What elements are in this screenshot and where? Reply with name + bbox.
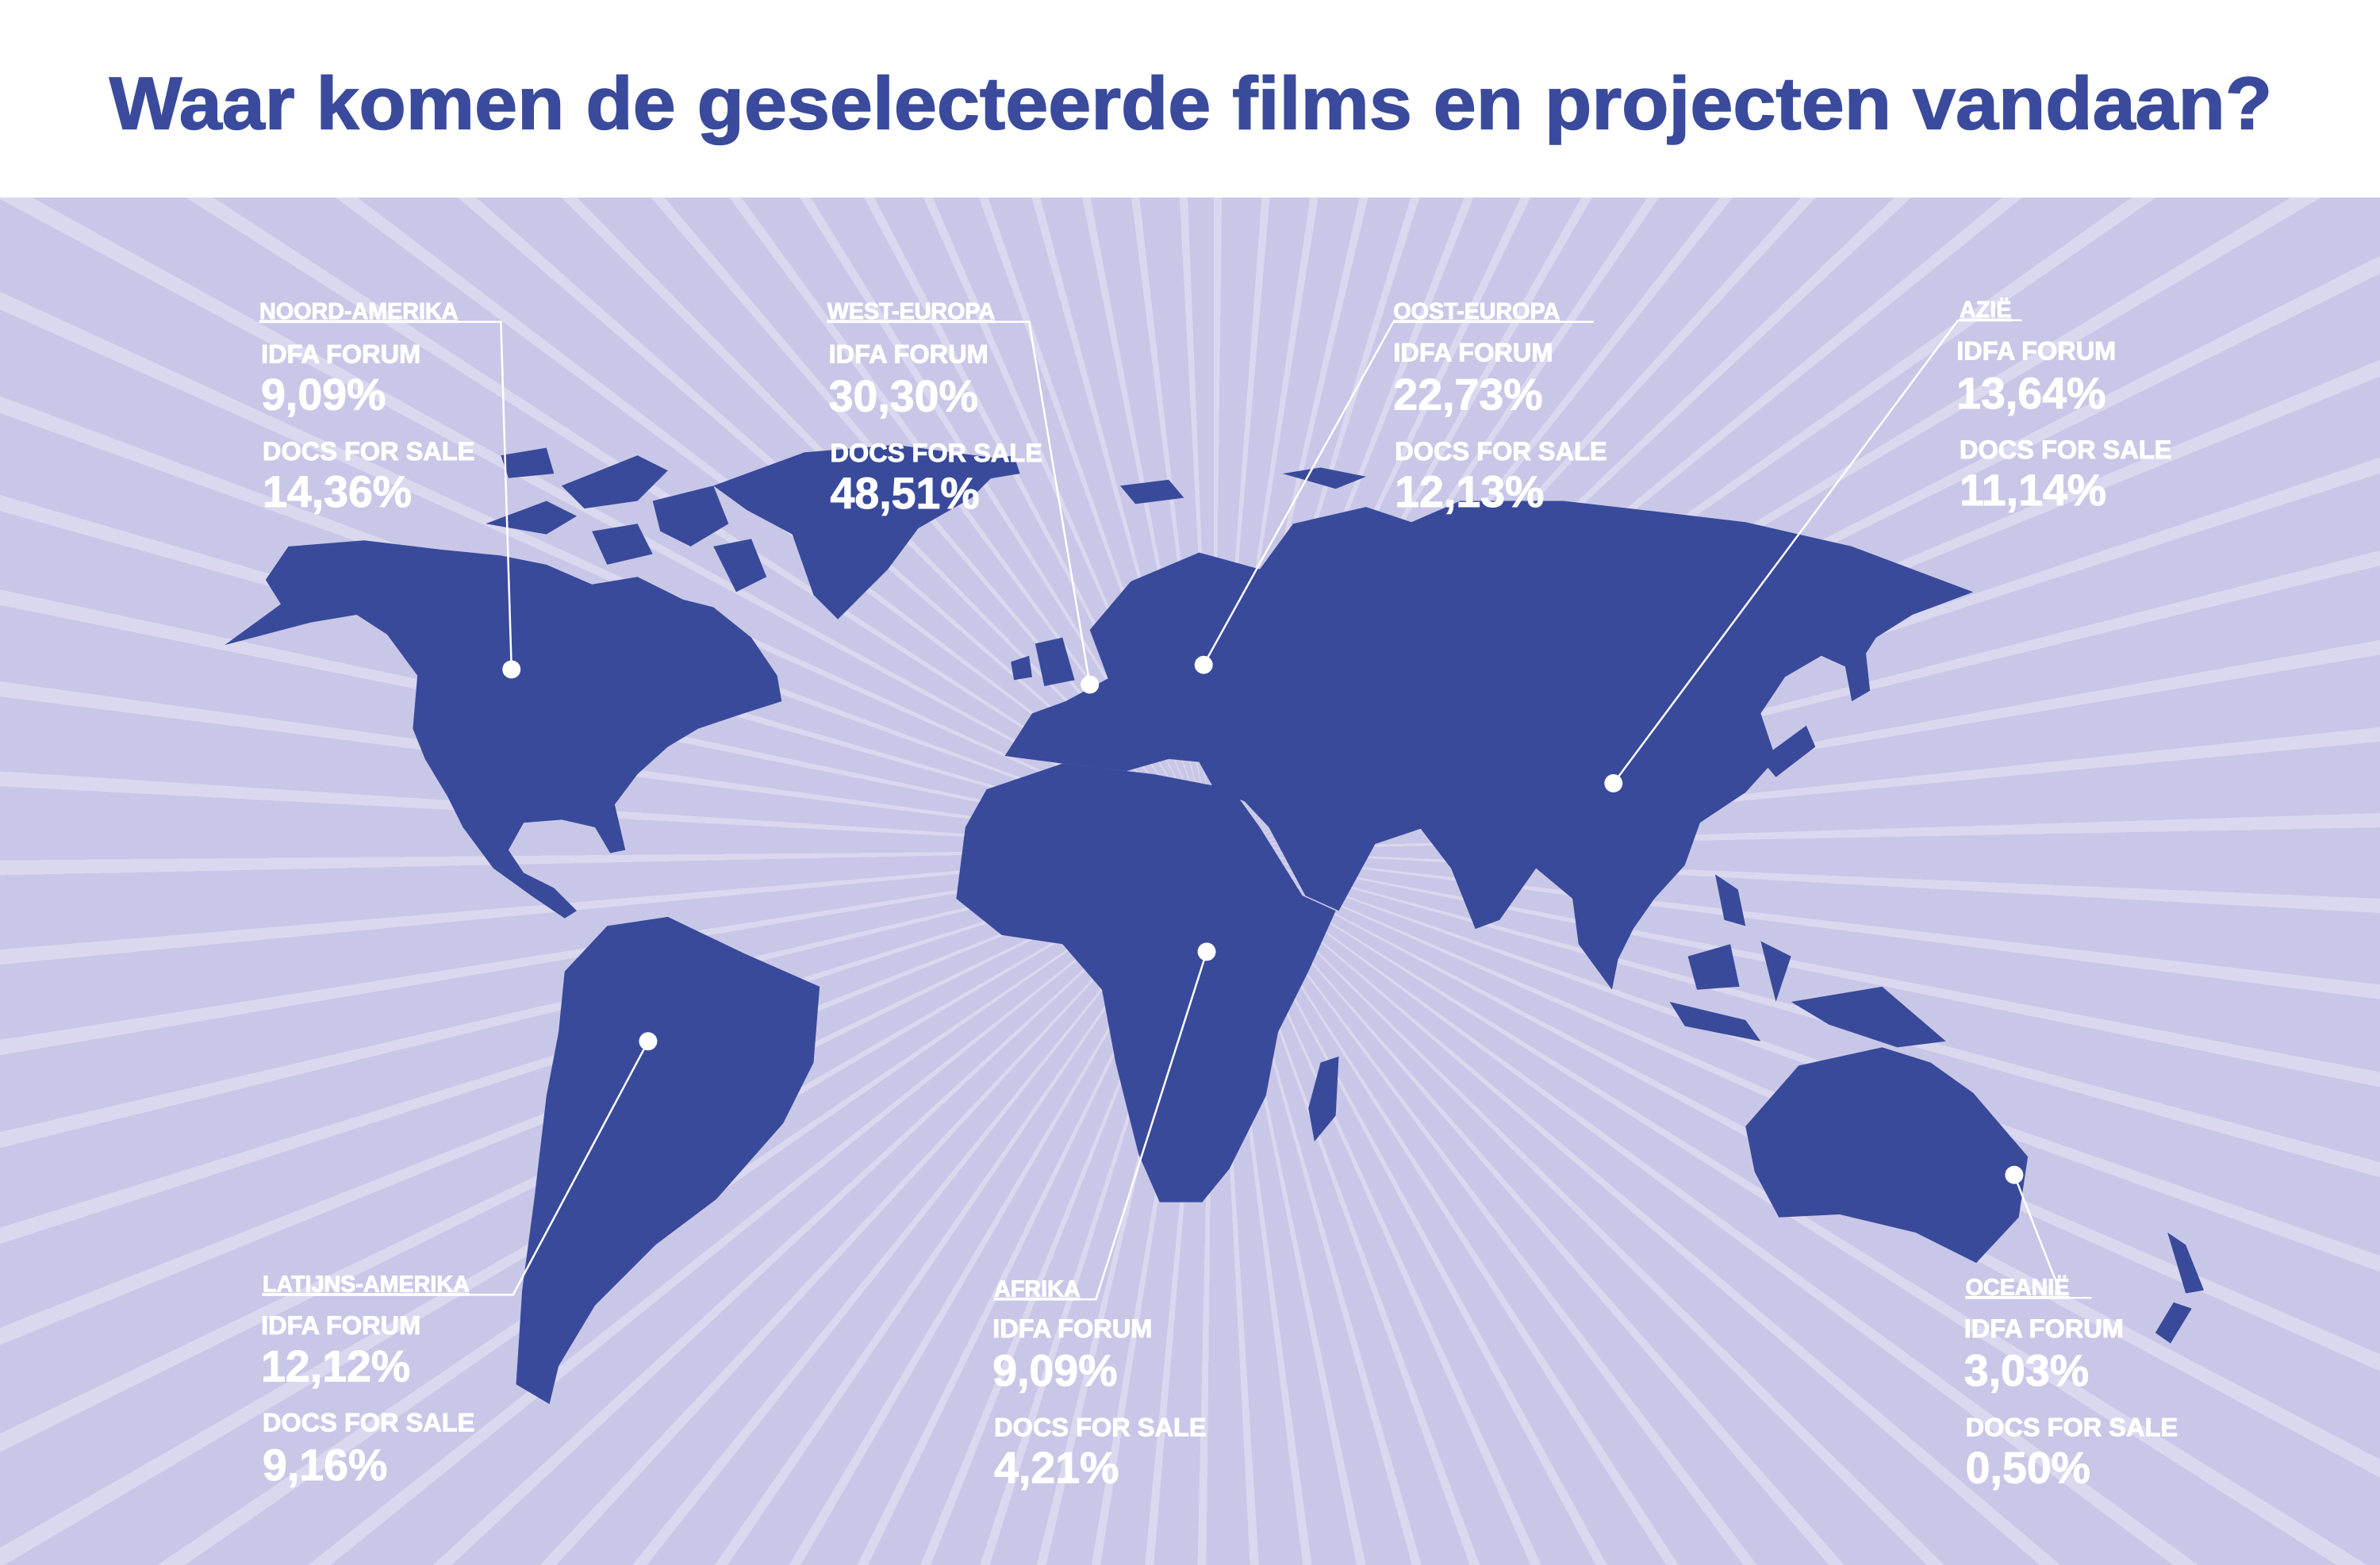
Japan bbox=[1760, 635, 1870, 777]
label: West-Europa: 48,51% bbox=[831, 469, 980, 518]
location dots bbox=[502, 656, 2023, 1184]
label: West-Europa: WEST-EUROPA bbox=[827, 299, 995, 324]
label: Azië: DOCS FOR SALE bbox=[1960, 435, 2171, 464]
label: Noord-Amerika: DOCS FOR SALE bbox=[263, 437, 474, 466]
label: Oceanië: 3,03% bbox=[1964, 1346, 2089, 1395]
label: Afrika: AFRIKA bbox=[994, 1276, 1081, 1302]
label: Oceanië: OCEANIË bbox=[1966, 1274, 2069, 1300]
label: Oceanië: 0,50% bbox=[1966, 1444, 2090, 1493]
label: Azië bbox=[1956, 297, 2171, 515]
label: Afrika: DOCS FOR SALE bbox=[994, 1413, 1207, 1441]
label: Oost-Europa: IDFA FORUM bbox=[1393, 338, 1553, 366]
label: Azië: AZIË bbox=[1960, 297, 2011, 323]
arctic islands bbox=[486, 448, 766, 592]
label: West-Europa: 30,30% bbox=[829, 372, 978, 421]
Madagascar bbox=[1308, 1057, 1339, 1141]
label: Oceanië: IDFA FORUM bbox=[1964, 1314, 2124, 1343]
label: Noord-Amerika: 14,36% bbox=[263, 467, 412, 516]
label: Oceanië bbox=[1964, 1274, 2178, 1493]
Africa bbox=[956, 764, 1336, 1203]
Iceland and Svalbard bbox=[971, 455, 1366, 504]
label: West-Europa: DOCS FOR SALE bbox=[831, 439, 1042, 467]
label: Oost-Europa: OOST-EUROPA bbox=[1393, 299, 1560, 324]
New Zealand bbox=[2155, 1233, 2204, 1344]
continent: North America bbox=[225, 540, 781, 919]
label: Noord-Amerika bbox=[259, 299, 474, 516]
label: Afrika: 9,09% bbox=[992, 1346, 1118, 1395]
label: Latijns-Amerika: LATIJNS-AMERIKA bbox=[263, 1272, 470, 1298]
labels bbox=[259, 297, 2178, 1493]
South America bbox=[516, 917, 820, 1404]
Greenland bbox=[713, 445, 1009, 619]
label: Afrika: 4,21% bbox=[994, 1444, 1119, 1493]
label: Azië: IDFA FORUM bbox=[1956, 337, 2116, 366]
title: Waar komen de geselecteerde films en projecten vandaan? bbox=[109, 62, 2272, 145]
label: Afrika: IDFA FORUM bbox=[992, 1314, 1152, 1343]
label: Oost-Europa: 22,73% bbox=[1393, 370, 1543, 420]
Australia bbox=[1745, 1047, 2028, 1263]
label: Oceanië: DOCS FOR SALE bbox=[1966, 1413, 2178, 1441]
label: Noord-Amerika: IDFA FORUM bbox=[261, 339, 420, 368]
label: Afrika bbox=[992, 1276, 1207, 1493]
label: Latijns-Amerika bbox=[261, 1272, 474, 1490]
Eurasia bbox=[1005, 501, 1973, 990]
leader lines bbox=[261, 320, 2091, 1299]
world map bbox=[225, 445, 2204, 1404]
label: Latijns-Amerika: IDFA FORUM bbox=[261, 1311, 420, 1340]
label: Latijns-Amerika: DOCS FOR SALE bbox=[263, 1409, 474, 1437]
label: Latijns-Amerika: 12,12% bbox=[261, 1341, 410, 1390]
label: Latijns-Amerika: 9,16% bbox=[263, 1440, 387, 1490]
label: Azië: 13,64% bbox=[1956, 369, 2106, 418]
British Isles bbox=[1011, 638, 1075, 686]
label: Azië: 11,14% bbox=[1960, 466, 2106, 515]
label: Noord-Amerika: 9,09% bbox=[261, 370, 386, 420]
label: Oost-Europa: 12,13% bbox=[1395, 467, 1544, 516]
label: West-Europa bbox=[827, 299, 1042, 518]
Southeast Asian islands bbox=[1670, 874, 1946, 1047]
label: Noord-Amerika: NOORD-AMERIKA bbox=[259, 299, 458, 324]
label: Oost-Europa: DOCS FOR SALE bbox=[1395, 437, 1607, 466]
label: Oost-Europa bbox=[1393, 299, 1607, 516]
label: West-Europa: IDFA FORUM bbox=[829, 339, 988, 368]
